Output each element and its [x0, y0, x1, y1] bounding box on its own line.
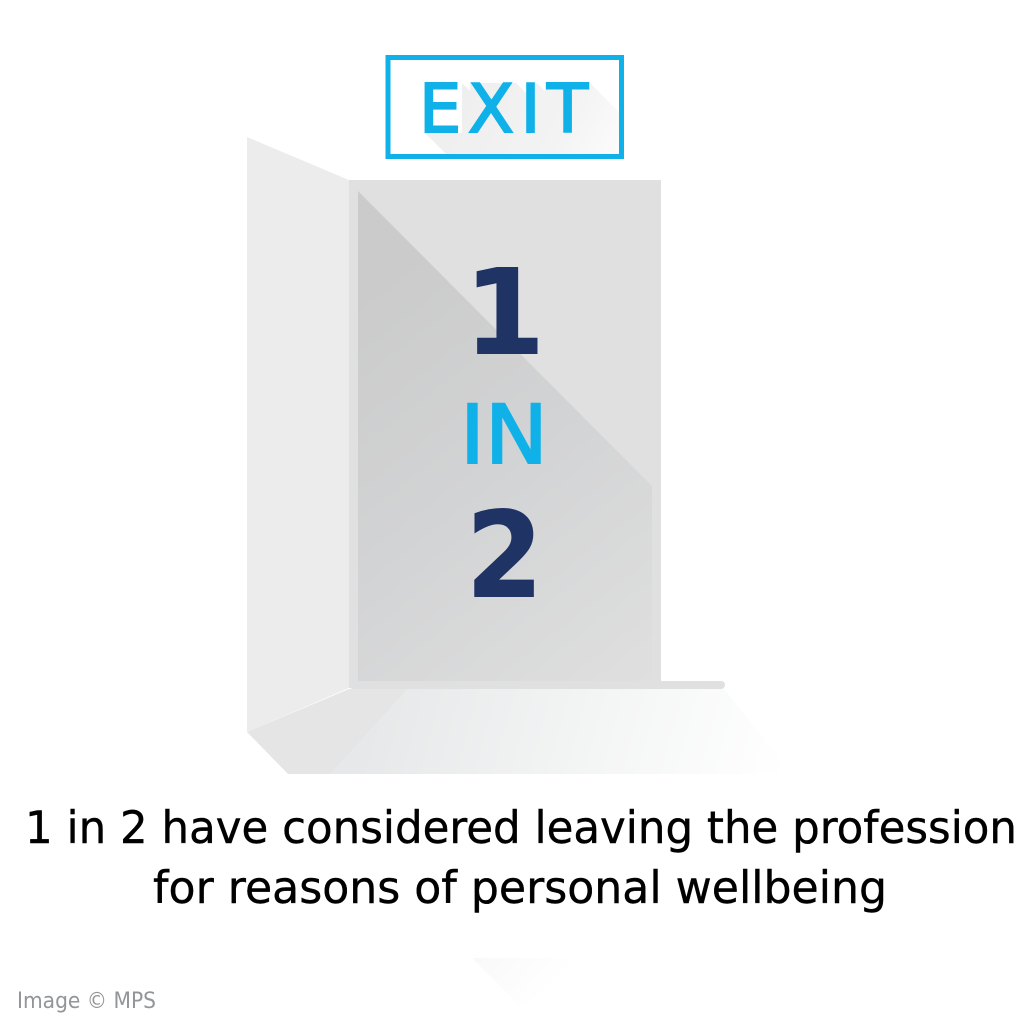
door opening shadow: [358, 191, 652, 682]
door sill: [349, 681, 725, 689]
door floor shadow: [247, 689, 408, 774]
open door leaf: [247, 137, 349, 732]
numeral 1: 1: [464, 244, 545, 382]
exit sign label: EXIT: [419, 70, 589, 148]
caption line 1: 1 in 2 have considered leaving the profession: [25, 803, 1017, 854]
floor light: [331, 689, 792, 774]
exit sign long shadow: [425, 83, 619, 155]
faint floor reflection: [472, 958, 578, 1008]
image credit: Image © MPS: [17, 989, 156, 1014]
word IN: IN: [460, 389, 548, 483]
door frame: [349, 180, 661, 688]
door illustration: [247, 137, 792, 774]
numeral 2: 2: [466, 488, 543, 626]
caption: [25, 803, 1017, 914]
exit sign: [388, 58, 622, 156]
caption line 2: for reasons of personal wellbeing: [153, 863, 887, 914]
exit sign border: [388, 58, 622, 156]
1 in 2 statistic: [460, 244, 548, 626]
